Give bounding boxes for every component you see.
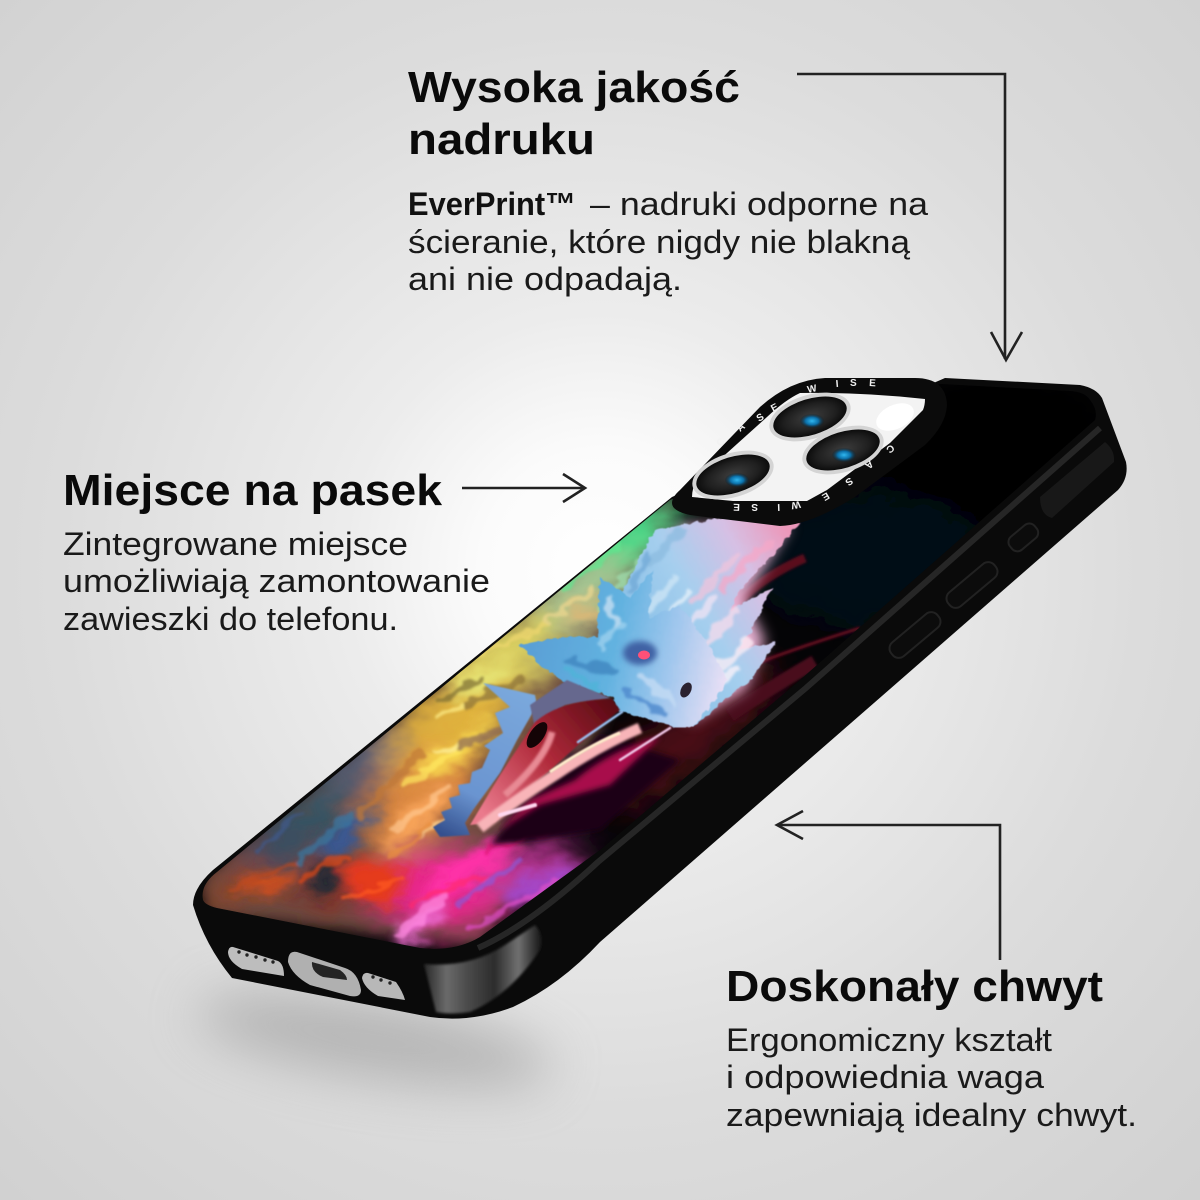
speaker dots right: [371, 975, 392, 985]
callout: strap mount: zawieszki do telefonu.: [63, 601, 398, 637]
description: Ergonomiczny kształt: [726, 1022, 1052, 1058]
dragon neck and spines: [433, 683, 537, 837]
callout: print quality: – nadruki odporne na: [590, 186, 928, 222]
red streaks in dark background: [730, 558, 860, 715]
arrow: strap mount: [462, 474, 585, 502]
volume down button: [886, 609, 944, 661]
arrow: print quality: [797, 74, 1022, 360]
rainbow background: [202, 494, 972, 949]
case body: [193, 378, 1127, 1019]
glossy corner highlight: [424, 925, 542, 1014]
phone case: [190, 370, 1130, 1106]
callout: strap mount: [63, 466, 490, 637]
case lip ridge: [478, 428, 1100, 948]
callout: print quality: [408, 63, 928, 297]
dragon mane: [612, 518, 800, 727]
upper lip panel: [530, 680, 610, 728]
dragon eye: [638, 650, 650, 660]
speaker dots left: [237, 950, 275, 964]
action button: [1006, 521, 1041, 554]
flash: [872, 398, 918, 436]
printed dragon artwork: [190, 370, 1130, 960]
tongue: [505, 732, 552, 795]
description: EverPrint™: [408, 186, 576, 222]
callout: print quality: ani nie odpadają.: [408, 261, 682, 297]
callout: print quality: ścieranie, które nigdy nie blakną: [408, 224, 910, 260]
dragon head: [520, 570, 728, 727]
dragon lower jaw: [480, 728, 640, 828]
right lens: [796, 417, 890, 483]
callout: print quality: nadruku: [408, 115, 595, 164]
drop shadow: [191, 974, 559, 1106]
camera bump: [672, 378, 947, 526]
dark region under jaw: [490, 735, 680, 845]
dragon nostril: [680, 682, 692, 698]
arrow: grip: [777, 811, 1000, 960]
painterly streaks: [230, 545, 640, 935]
top lens: [763, 384, 857, 450]
camera module: [672, 378, 947, 526]
head shading: [565, 600, 675, 715]
description: Zintegrowane miejsce: [63, 526, 408, 562]
charging port: [288, 952, 361, 996]
volume up button: [943, 559, 1001, 611]
callout: grip: zapewniają idealny chwyt.: [726, 1097, 1137, 1133]
brand ring text bottom: CASEWISE: [733, 442, 896, 512]
right speaker: [362, 973, 405, 1000]
magenta under jaw: [500, 737, 660, 830]
brand ring text top: CASEWISE: [715, 378, 876, 449]
port opening: [312, 962, 347, 980]
left lens: [686, 442, 780, 508]
artwork underpainting: [200, 490, 680, 945]
mane glow: [640, 525, 790, 722]
dragon teeth: [500, 712, 670, 815]
callout: grip: [726, 962, 1137, 1133]
heading: Doskonały chwyt: [726, 962, 1103, 1011]
mouth cavity: [526, 722, 548, 748]
left speaker: [228, 947, 284, 976]
heading: Miejsce na pasek: [63, 466, 443, 515]
dragon mouth: [470, 699, 620, 825]
dragon eye socket: [623, 641, 657, 665]
callout: strap mount: umożliwiają zamontowanie: [63, 563, 490, 599]
callout: grip: i odpowiednia waga: [726, 1059, 1044, 1095]
mane pale fur strokes: [630, 530, 770, 695]
strap mount slot: [1040, 442, 1114, 518]
camera window: [692, 393, 925, 501]
heading: Wysoka jakość: [408, 63, 740, 112]
